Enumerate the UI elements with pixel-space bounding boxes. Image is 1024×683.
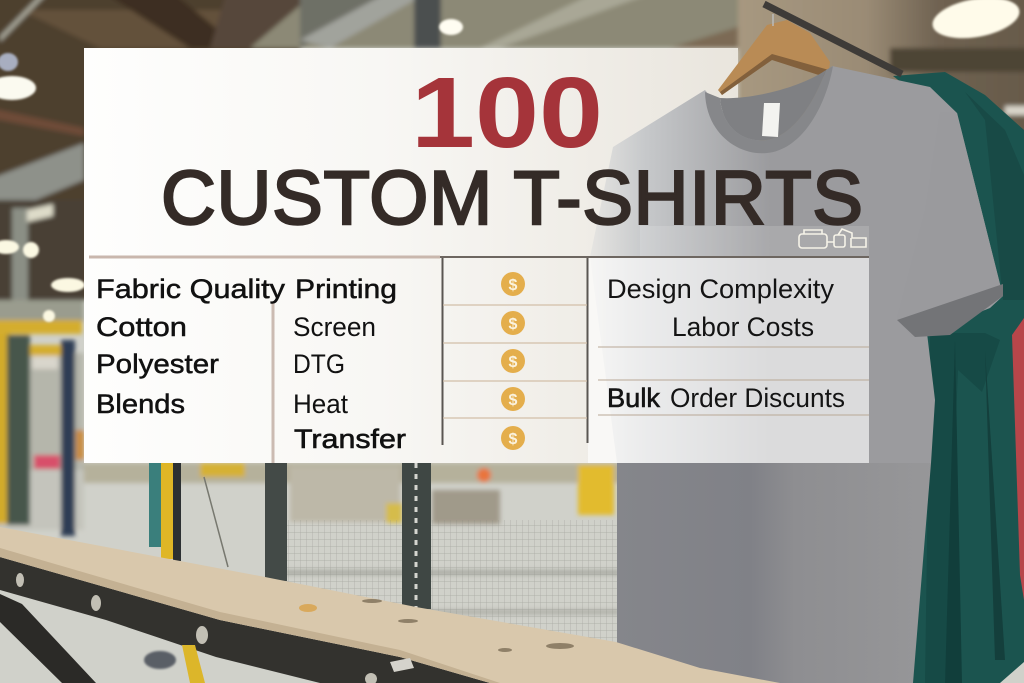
wire mesh fence — [285, 520, 620, 645]
ceiling lamp far — [439, 19, 463, 35]
column: printing: DTG — [293, 349, 345, 379]
coin icons: $ — [509, 431, 518, 448]
cost factors text: Labor Costs — [672, 312, 814, 342]
column: fabric quality: Fabric Quality — [96, 274, 286, 304]
shirt collar — [705, 66, 833, 153]
wood knots — [362, 599, 574, 652]
fence posts — [149, 463, 431, 609]
sleeve cuff — [897, 284, 1003, 337]
cost factors text: Design Complexity — [607, 274, 834, 304]
column: fabric quality: Cotton — [96, 312, 187, 342]
cost factors text — [607, 274, 845, 413]
table grid — [89, 257, 869, 463]
metal beam — [0, 557, 490, 683]
wood front edge — [0, 548, 500, 683]
grey t-shirt — [590, 66, 1003, 683]
column: printing — [293, 274, 406, 454]
green shirts on rack — [893, 72, 1024, 683]
clothes rail — [764, 4, 902, 74]
coin icons: $ — [509, 354, 518, 371]
title: custom t-shirts: CUSTOM T-SHIRTS — [161, 156, 863, 241]
coin icons: $ — [509, 316, 518, 333]
column: printing: Heat — [293, 389, 348, 419]
coin icons: $ — [509, 392, 518, 409]
wood plank — [0, 527, 780, 683]
column: printing: Screen — [293, 312, 376, 342]
veil over lower shirt — [588, 226, 869, 463]
coin icons — [501, 272, 525, 450]
wood stain — [299, 604, 317, 612]
ceiling lamp right — [929, 0, 1023, 44]
cost factors text: Bulk — [607, 383, 660, 413]
cost factors text: Order Discunts — [670, 383, 845, 413]
neck tag — [762, 103, 780, 137]
small sketch icon — [799, 229, 866, 248]
ceiling lamp left — [0, 53, 36, 100]
coin icons: $ — [509, 277, 518, 294]
title: 100: 100 — [411, 57, 603, 169]
column: fabric quality — [96, 274, 286, 419]
yellow floor object — [182, 645, 205, 683]
beam strut — [0, 594, 96, 683]
inside neck — [720, 70, 826, 140]
column: fabric quality: Blends — [96, 389, 185, 419]
column: printing: Printing — [295, 274, 397, 304]
wooden bench — [0, 527, 780, 683]
distant lamps left — [0, 240, 85, 322]
column: fabric quality: Polyester — [96, 349, 219, 379]
dark floor object — [144, 651, 176, 669]
corner bracket — [390, 658, 414, 672]
column: printing: Transfer — [294, 424, 406, 454]
beam bolts — [16, 573, 377, 683]
lower shirt body — [617, 463, 931, 683]
wooden hanger — [718, 14, 830, 95]
white translucent panel — [84, 48, 869, 463]
sleeve — [897, 112, 1003, 337]
